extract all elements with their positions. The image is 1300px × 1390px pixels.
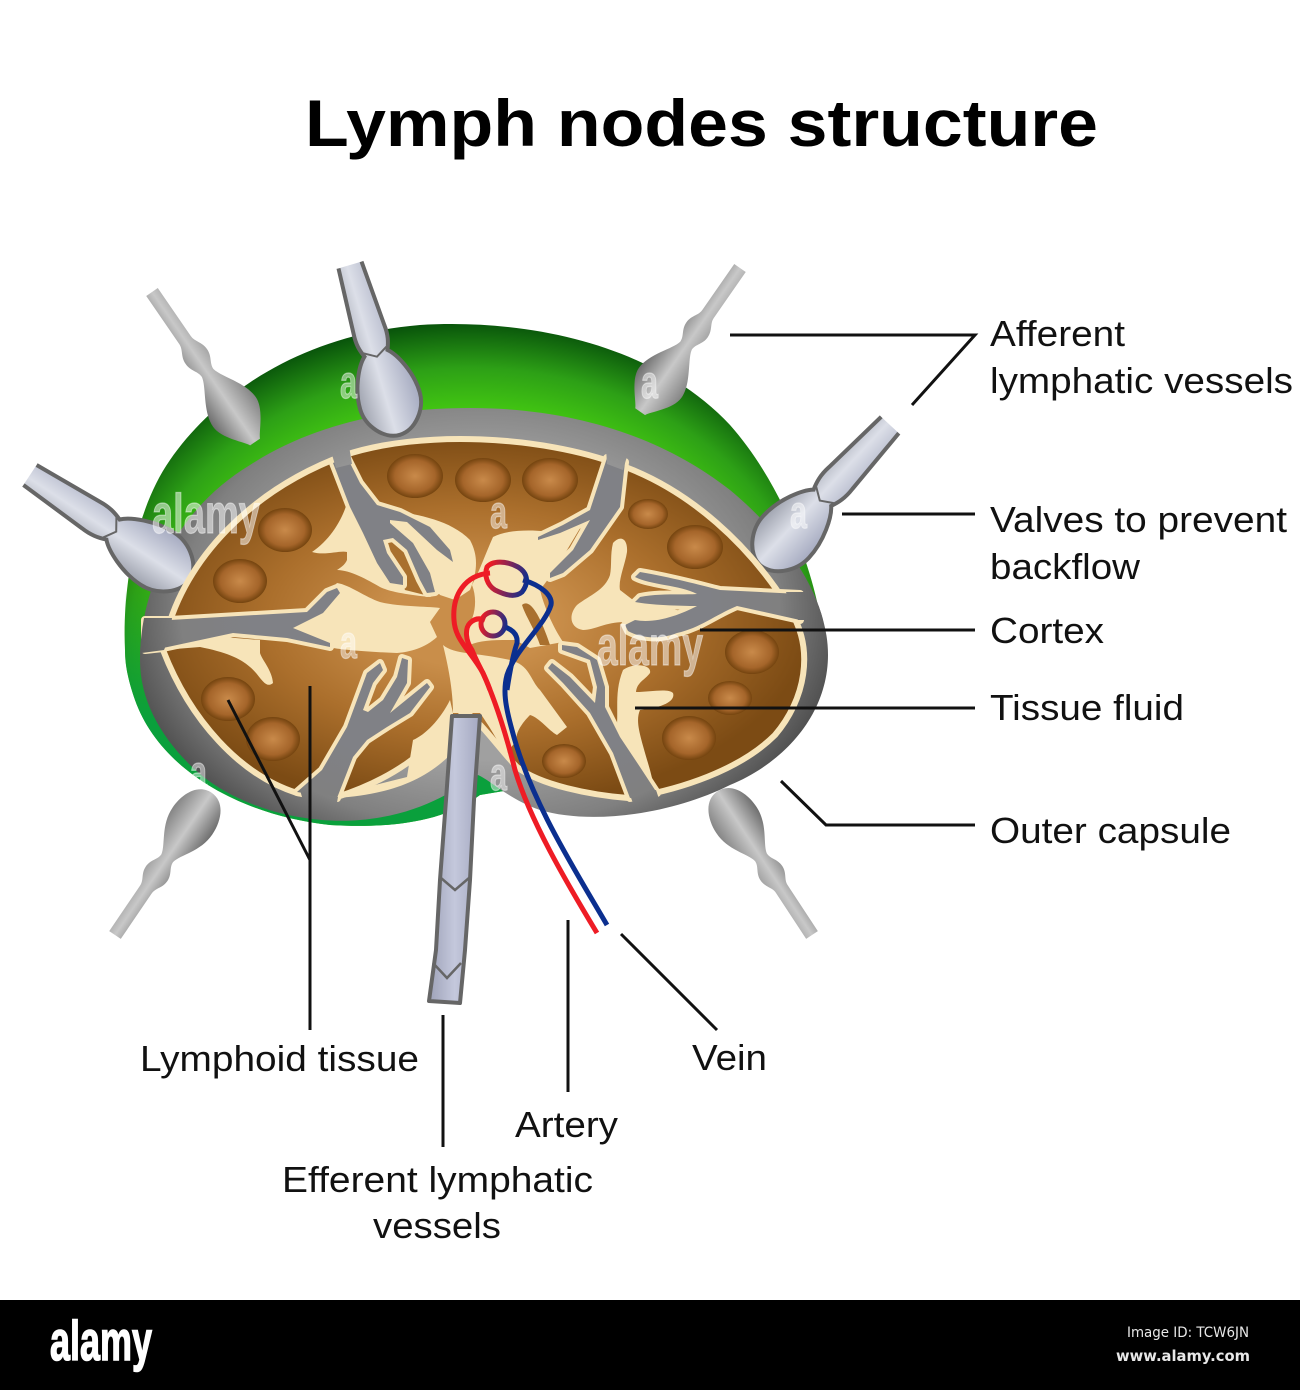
footer bar — [0, 1300, 1300, 1390]
watermark: a — [340, 616, 357, 668]
outer capsule — [140, 408, 828, 821]
footer bar: alamy — [50, 1309, 152, 1372]
watermark: a — [490, 748, 507, 800]
afferent vessel: left with valve — [13, 449, 207, 606]
lymphoid tissue body — [163, 439, 804, 798]
afferent vessel: lower right — [698, 778, 832, 948]
afferent vessel: upper left — [131, 277, 277, 457]
efferent lymphatic vessel — [429, 716, 480, 1003]
label: tissue fluid: Tissue fluid — [990, 687, 1184, 728]
label: outer capsule: Outer capsule — [990, 810, 1231, 851]
label: efferent lymphatic vessels — [282, 1159, 593, 1246]
watermark: a — [340, 356, 357, 408]
vein — [505, 580, 607, 925]
capillary loop: upper — [486, 562, 527, 595]
brown accents in fluid — [385, 540, 550, 645]
label: efferent lymphatic vessels: Efferent lymphatic — [282, 1159, 593, 1200]
trabecula: left septum — [145, 588, 340, 650]
leader lines — [228, 335, 975, 1147]
watermark: a — [490, 486, 507, 538]
label: afferent lymphatic vessels: lymphatic vessels — [990, 360, 1293, 401]
footer bar: www.alamy.com — [1116, 1347, 1250, 1365]
label: afferent lymphatic vessels — [990, 313, 1293, 401]
watermark: alamy — [597, 614, 703, 677]
watermark: a — [641, 356, 658, 408]
watermark — [152, 356, 807, 800]
label: afferent lymphatic vessels: Afferent — [990, 313, 1125, 354]
label: cortex: Cortex — [990, 610, 1104, 651]
footer bar: Image ID: TCW6JN — [1127, 1325, 1249, 1341]
label: lymphoid tissue: Lymphoid tissue — [140, 1038, 419, 1079]
watermark: a — [190, 746, 207, 798]
trabecula: lower left tree — [297, 658, 430, 798]
title: Lymph nodes structure — [305, 86, 1098, 160]
label: vein: Vein — [692, 1037, 767, 1078]
afferent vessel: upper right — [619, 253, 761, 427]
lymph nodules — [201, 454, 779, 778]
label: efferent lymphatic vessels: vessels — [373, 1205, 501, 1246]
afferent vessel: top centre with valve — [320, 256, 430, 444]
watermark: alamy — [152, 482, 260, 545]
trabecula: lower right tree — [548, 645, 657, 798]
capsule junction patches — [135, 446, 835, 808]
tissue fluid — [163, 503, 690, 798]
afferent vessel: lower left — [95, 779, 232, 948]
valve vessel: right — [737, 404, 913, 586]
artery — [454, 573, 597, 933]
label: valves to prevent backflow: Valves to prevent — [990, 499, 1287, 540]
capillary loop: lower — [481, 612, 505, 636]
trabecula: upper left tree — [333, 457, 453, 593]
trabecula: upper right tree — [538, 458, 625, 578]
trabecula: right tree — [625, 572, 800, 637]
label: artery: Artery — [515, 1104, 618, 1145]
label: valves to prevent backflow: backflow — [990, 546, 1141, 587]
green outer tissue — [125, 324, 820, 826]
label: valves to prevent backflow — [990, 499, 1287, 587]
watermark: a — [790, 486, 807, 538]
